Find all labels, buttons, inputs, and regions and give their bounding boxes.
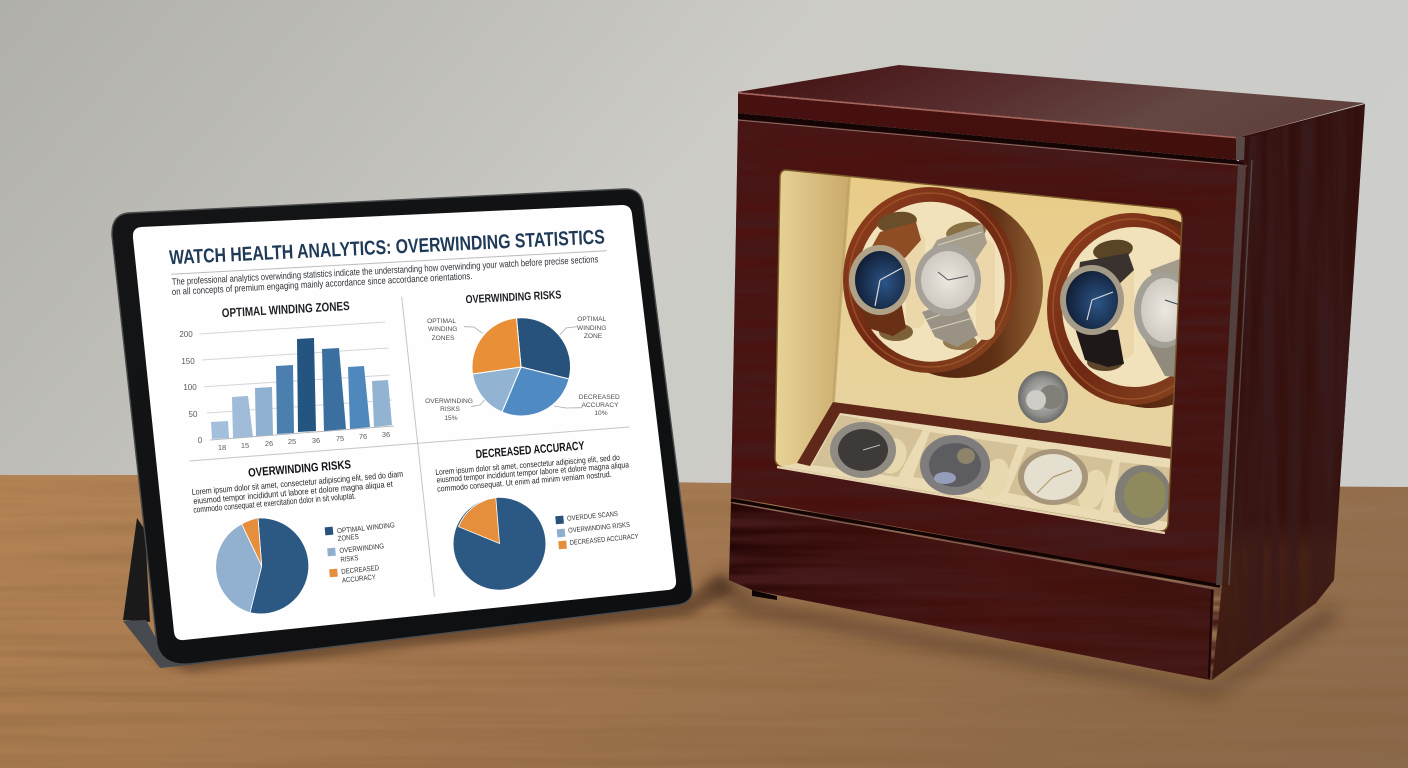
tray watch 3 [1018,449,1088,505]
legend right: DECREASED ACCURACY [570,533,639,547]
watch 3 [1060,253,1134,367]
pie chart right [454,498,546,590]
watch winder box [725,65,1370,685]
legend left [325,520,396,585]
pie slices [472,318,571,416]
intro text: on all concepts of premium engaging mainly accordance since accordance orientations. [172,271,473,298]
y axis labels: 100 [183,383,197,392]
glass window interior [776,170,1182,530]
pie leader lines [464,327,582,408]
legend right: OVERWINDING RISKS [568,522,631,535]
intro text [172,254,599,298]
dashboard title: WATCH HEALTH ANALYTICS: OVERWINDING STATISTICS [169,226,605,269]
pie labels: ZONES [432,335,455,342]
pie labels: DECREASED [579,394,620,401]
x axis labels: 75 [336,434,344,443]
pie labels: ACCURACY [581,402,619,409]
winder right [1047,213,1182,408]
watch 1 [849,222,921,336]
y axis labels: 150 [181,357,195,366]
legend left: ACCURACY [341,572,376,585]
y axis labels: 50 [189,410,198,419]
window bezel edge [775,170,1182,531]
watch 2 [915,224,987,347]
y axis labels: 200 [179,330,193,339]
section heading: DECREASED ACCURACY [475,438,585,461]
lower tray [770,402,1172,535]
y axis labels: 0 [198,436,203,445]
section body text [435,453,630,494]
x axis labels: 76 [359,432,367,441]
wood ring [1047,213,1181,405]
legend left: DECREASED [341,563,380,576]
x axis labels: 18 [218,443,226,452]
pie heading: OVERWINDING RISKS [465,289,562,306]
cream cushion [1062,227,1180,387]
tray watch 4 [1115,465,1171,525]
section body text: Lorem ipsum dolor sit amet, consectetur adipiscing elit, sed do diam [191,469,403,497]
wooden table [0,470,1408,768]
tray watch 1 [830,422,896,478]
front corner gloss [1209,137,1252,678]
tablet screen [133,205,676,640]
legend right [555,511,639,549]
pie labels: 15% [444,415,458,422]
section: decreased accuracy bottom right [435,438,639,590]
back wall [779,170,1182,467]
box lid front lip [738,92,1240,160]
legend left: ZONES [337,532,359,543]
section body text: Lorem ipsum dolor sit amet, consectetur adipiscing elit, sed do [435,453,621,477]
table shadows [150,570,1340,698]
x axis labels: 25 [288,437,296,446]
bars [211,338,392,439]
tablet body [112,189,692,664]
bar chart: optimal winding zones [179,299,394,452]
pie labels: OPTIMAL [427,318,456,325]
pie chart: overwinding risks top right [425,289,620,422]
section body text: eiusmod tempor incididunt tempor labore et dolore magna aliqua [436,460,630,485]
x axis labels [218,430,390,452]
section body text: eiusmod tempor incididunt ut labore et dolore magna aliqua et [193,479,394,506]
section: overwinding risks bottom left [191,457,403,614]
box lower drawer [729,503,1214,680]
section body text: commodo consequat. Ut enim ad minim veniam nostrud. [437,470,612,494]
pie chart left [216,518,309,614]
pillows [906,232,925,328]
legend left: OPTIMAL WINDING [337,520,396,535]
x axis labels: 36 [382,430,390,439]
box right side [1210,100,1370,685]
tablet stand cover [123,518,200,668]
wall background [0,0,1408,490]
control knob [1018,371,1068,423]
bar chart heading: OPTIMAL WINDING ZONES [221,299,350,320]
section heading: OVERWINDING RISKS [248,457,351,480]
left wall [775,170,850,465]
tray cushions [884,438,1106,508]
pie labels: WINDING [577,325,606,332]
pillow [1115,258,1134,358]
pie labels: OVERWINDING [425,398,473,405]
watch 4 [1134,259,1180,377]
x axis labels: 36 [312,436,320,445]
pie labels: ZONE [584,333,603,340]
intro text: The professional analytics overwinding statistics indicate the understanding how overwinding your watch before precise sections [172,254,599,288]
pie labels: WINDING [428,326,457,333]
drawer seam [731,500,1220,586]
y axis labels [179,330,203,445]
tablet [112,189,692,664]
box top lid [738,65,1365,137]
tray watch 2 [920,435,990,495]
pie labels [425,316,620,422]
x axis labels: 15 [241,441,249,450]
pie labels: OPTIMAL [577,316,607,323]
legend left: RISKS [340,553,359,564]
x axis labels: 26 [265,439,273,448]
legend left: OVERWINDING [339,541,385,555]
section body text: commodo consequat et exercitation dolor in sit voluptat. [193,491,356,515]
wood ring [843,187,1017,373]
box front frame [731,118,1247,585]
legend right: OVERDUE SCANS [567,511,619,523]
winder left [843,187,1043,378]
pie labels: 10% [594,410,608,417]
cream cushion [857,202,1005,362]
section body text [191,469,403,515]
box feet [752,590,777,600]
pie labels: RISKS [440,406,460,413]
